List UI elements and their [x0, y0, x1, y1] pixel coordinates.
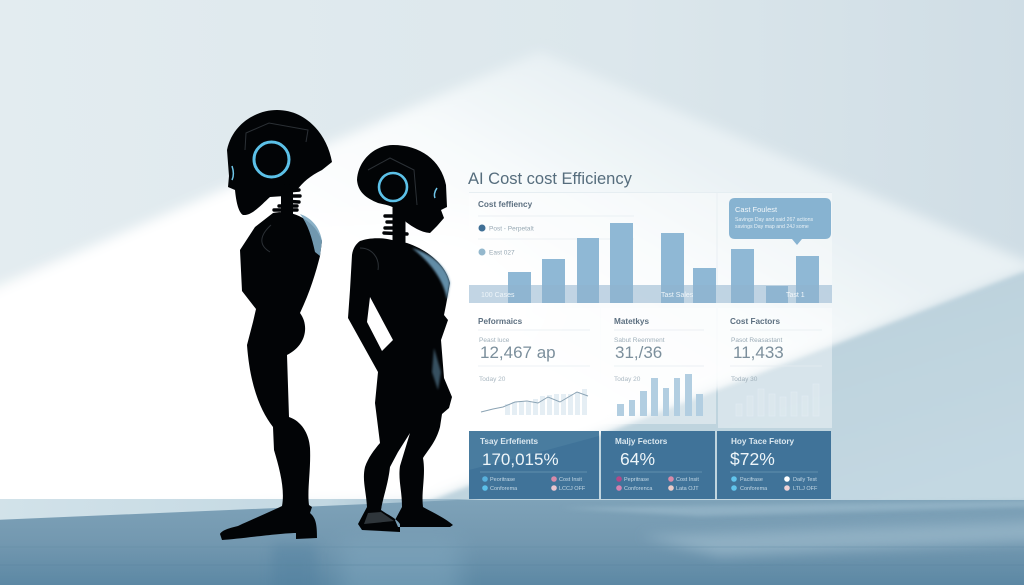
panel: cost factors — [718, 308, 832, 428]
neck — [384, 208, 407, 245]
callout: Cast Foulest — [735, 205, 778, 214]
panel: major factors — [601, 431, 715, 499]
legend: Cost Insit — [559, 477, 582, 483]
robot left silhouette — [220, 110, 332, 540]
legend — [478, 224, 534, 256]
axis band: Tast Sales — [661, 292, 694, 299]
panel: performance: Peast luce — [479, 337, 510, 344]
panel: cost factors: 11,433 — [733, 343, 784, 362]
panel: materials — [601, 308, 716, 424]
legend — [482, 476, 586, 492]
axis band — [469, 285, 832, 303]
legend: LTLJ OFF — [793, 486, 818, 492]
panel: top dashboard — [469, 192, 832, 303]
panel: performance — [469, 308, 600, 424]
neck — [274, 190, 300, 215]
panel: materials: 31,/36 — [615, 343, 662, 362]
subheading: cost efficiency: Cost feffiency — [478, 200, 533, 209]
panel: key take factory: $72% — [730, 449, 775, 469]
bar chart: ghost bars — [736, 384, 819, 416]
legend: Daily Test — [793, 477, 817, 483]
bar chart: cost efficiency — [508, 223, 819, 303]
panel: key efficients: 170,015% — [482, 450, 559, 469]
head — [227, 110, 332, 215]
legend: Post - Perpetalt — [489, 226, 534, 232]
legend: East 027 — [489, 250, 515, 256]
panel: key efficients — [469, 431, 599, 499]
floor — [0, 499, 1024, 585]
body — [348, 238, 453, 532]
panel: materials: Matetkys — [614, 317, 649, 326]
head — [357, 145, 447, 233]
callout — [729, 198, 831, 245]
line chart — [481, 389, 588, 415]
panel: materials: Today 20 — [614, 376, 641, 383]
legend: Pepritrase — [624, 477, 649, 483]
axis band: 100 Cases — [481, 292, 515, 299]
panel: key take factory — [717, 431, 831, 499]
legend: Conforema — [740, 486, 768, 492]
legend: Peoritrase — [490, 477, 515, 483]
panel: performance: Today 20 — [479, 376, 506, 383]
legend: Pacifrase — [740, 477, 763, 483]
panel: cost factors: Today 30 — [731, 376, 758, 383]
panel: major factors: Maljy Fectors — [615, 437, 668, 446]
robot right silhouette — [348, 145, 453, 532]
legend: Conforema — [490, 486, 518, 492]
legend: LCCJ OFF — [559, 486, 586, 492]
panel: key efficients: Tsay Erfefients — [480, 437, 539, 446]
ear ring — [254, 142, 289, 177]
axis band: Tast 1 — [786, 292, 805, 299]
panel: cost factors: Cost Factors — [730, 317, 780, 326]
dashboard title: AI Cost cost Efficiency — [468, 170, 633, 188]
panel: major factors: 64% — [620, 449, 655, 469]
panel: performance: 12,467 ap — [480, 343, 556, 362]
ear ring — [379, 173, 407, 201]
callout: savings Day map and 24J some — [735, 224, 809, 230]
legend — [731, 476, 818, 492]
body — [220, 212, 322, 540]
legend: Lata OJT — [676, 486, 699, 492]
panel: cost factors: Pasot Reasastant — [731, 337, 783, 344]
panel: performance: Peformaics — [478, 317, 523, 326]
panel: materials: Sabut Reemment — [614, 337, 665, 344]
panel: key take factory: Hoy Tace Fetory — [731, 437, 795, 446]
legend: Conforenca — [624, 486, 653, 492]
bar chart: materials — [617, 374, 703, 416]
legend — [616, 476, 699, 492]
callout: Savings Day and said 267 actions — [735, 217, 814, 223]
legend: Cost Insit — [676, 477, 699, 483]
